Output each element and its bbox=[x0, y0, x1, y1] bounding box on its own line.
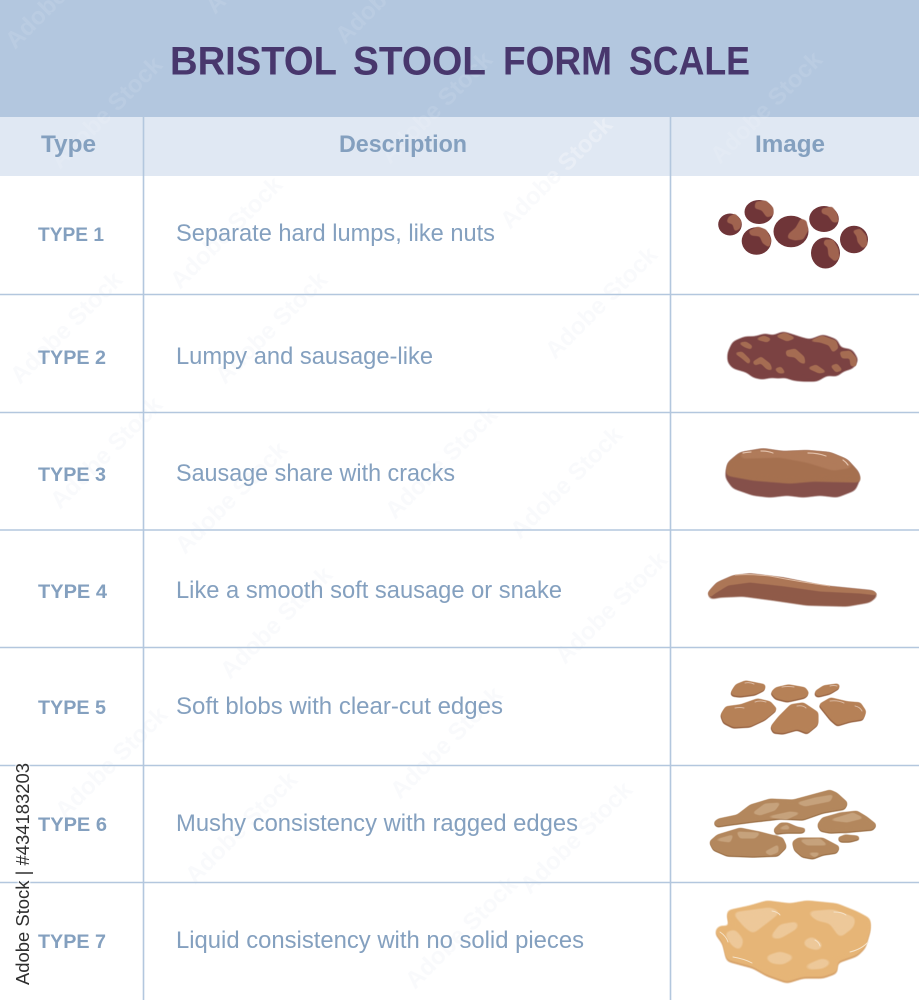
icon: type 2 lumpy sausage bbox=[728, 332, 858, 381]
type labels bbox=[38, 225, 107, 953]
text: Adobe Stock bbox=[385, 681, 508, 804]
descriptions: Mushy consistency with ragged edges bbox=[176, 810, 578, 837]
title bbox=[170, 40, 750, 84]
text: Adobe Stock bbox=[5, 266, 128, 389]
type labels: TYPE 2 bbox=[38, 348, 106, 369]
text: Adobe Stock bbox=[515, 776, 638, 899]
text: Adobe Stock bbox=[170, 436, 293, 559]
icon: type 5 soft blobs bbox=[720, 680, 866, 735]
column headers bbox=[41, 131, 825, 158]
descriptions bbox=[176, 220, 584, 954]
icon: type 3 sausage with cracks bbox=[726, 449, 861, 497]
type labels: TYPE 4 bbox=[38, 582, 107, 603]
icon: type 7 liquid puddle bbox=[715, 901, 870, 983]
text: Adobe Stock bbox=[50, 701, 173, 824]
descriptions: Soft blobs with clear-cut edges bbox=[176, 693, 503, 720]
text: Adobe Stock bbox=[495, 111, 618, 234]
type labels: TYPE 6 bbox=[38, 815, 107, 836]
icon: type 1 separate lumps bbox=[718, 200, 868, 268]
text: Adobe Stock bbox=[400, 871, 523, 994]
column headers: Description bbox=[339, 131, 467, 158]
text: Adobe Stock bbox=[210, 266, 333, 389]
descriptions: Separate hard lumps, like nuts bbox=[176, 220, 495, 247]
header band bbox=[0, 0, 919, 117]
column header band bbox=[0, 117, 919, 176]
column headers: Type bbox=[41, 131, 96, 158]
text: Adobe Stock bbox=[380, 401, 503, 524]
text: Adobe Stock bbox=[550, 546, 673, 669]
text: Adobe Stock bbox=[180, 766, 303, 889]
descriptions: Lumpy and sausage-like bbox=[176, 343, 433, 370]
text: Adobe Stock bbox=[45, 391, 168, 514]
text: Adobe Stock bbox=[705, 46, 828, 169]
type labels: TYPE 1 bbox=[38, 225, 104, 246]
text: Adobe Stock bbox=[165, 171, 288, 294]
text: Adobe Stock bbox=[505, 421, 628, 544]
descriptions: Sausage share with cracks bbox=[176, 460, 455, 487]
title: BRISTOL bbox=[170, 40, 337, 84]
text: Adobe Stock bbox=[215, 561, 338, 684]
type labels: TYPE 7 bbox=[38, 932, 106, 953]
text: Adobe Stock bbox=[375, 46, 498, 169]
icon: type 4 smooth sausage bbox=[708, 574, 878, 606]
type labels: TYPE 5 bbox=[38, 698, 106, 719]
stock credit: Adobe Stock | #434183203 bbox=[13, 763, 33, 985]
title: SCALE bbox=[629, 40, 750, 84]
text: Adobe Stock bbox=[540, 241, 663, 364]
title: FORM bbox=[503, 40, 612, 84]
type labels: TYPE 3 bbox=[38, 465, 106, 486]
descriptions: Liquid consistency with no solid pieces bbox=[176, 927, 584, 954]
title: STOOL bbox=[353, 40, 486, 84]
descriptions: Like a smooth soft sausage or snake bbox=[176, 577, 562, 604]
icon: type 6 mushy ragged pieces bbox=[709, 790, 877, 860]
column headers: Image bbox=[755, 131, 825, 158]
text: Adobe Stock bbox=[45, 51, 168, 174]
